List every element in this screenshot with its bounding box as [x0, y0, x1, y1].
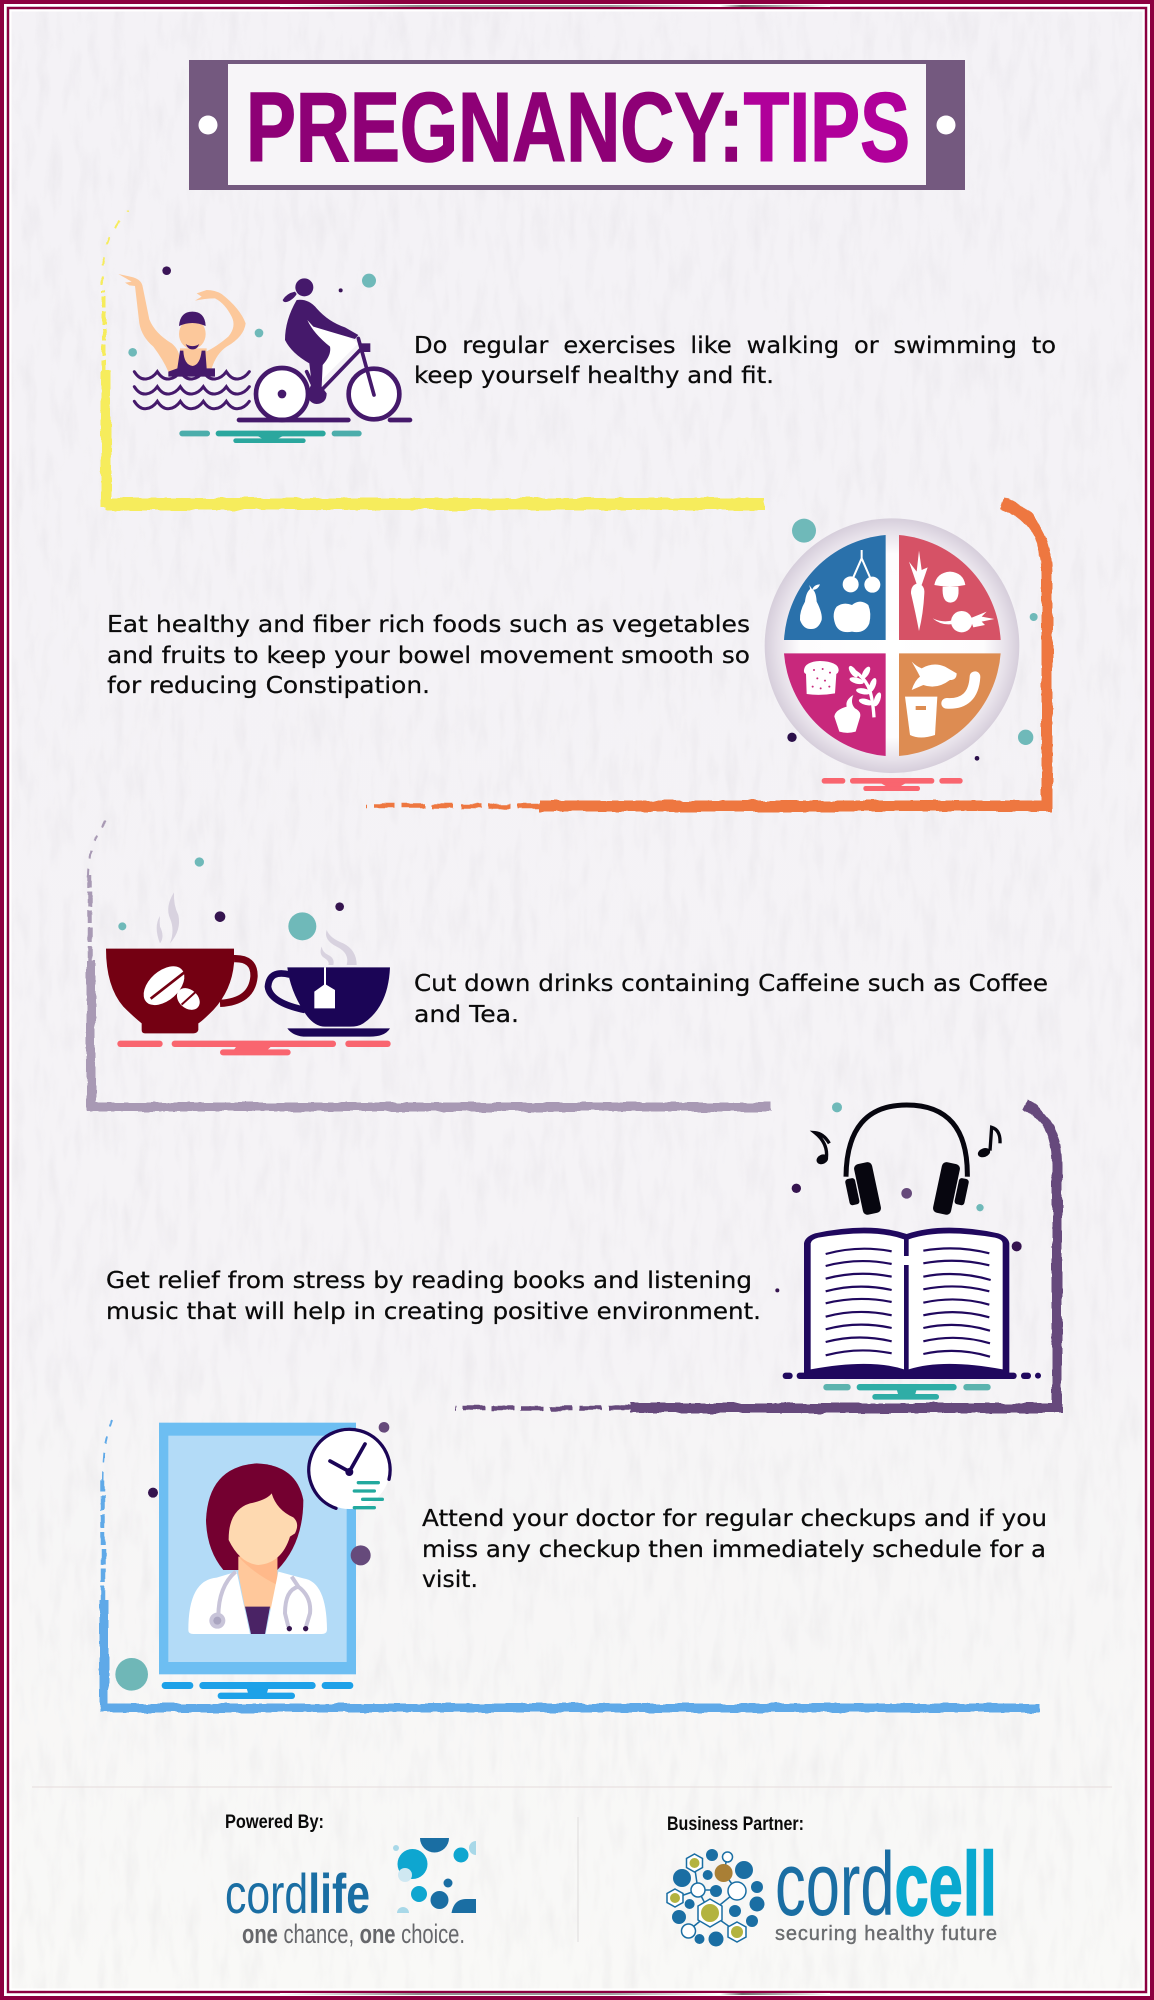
portrait card	[159, 1423, 356, 1674]
frame: purple	[455, 1104, 1057, 1408]
powered by label: Powered By:	[225, 1812, 324, 1833]
clock	[309, 1428, 390, 1509]
swimmer	[118, 274, 249, 409]
protein quadrant	[899, 653, 1001, 756]
footer dividers	[32, 1786, 1112, 1942]
illustration: book and headphones	[775, 1102, 1041, 1400]
plate dots	[787, 519, 1038, 761]
tip 4 text: music that will help in creating positive environment.	[106, 1297, 761, 1325]
illustration: swimming and cycling	[118, 266, 410, 443]
illustration: doctor	[115, 1422, 390, 1699]
frame: yellow	[102, 210, 764, 508]
headphones	[845, 1105, 969, 1216]
cordlife tagline: one chance, one choice.	[242, 1919, 465, 1949]
dots	[128, 266, 376, 357]
cordlife wordmark: cordlife	[225, 1862, 370, 1925]
music notes	[815, 1127, 1000, 1166]
title plate	[189, 60, 965, 190]
cordcell wordmark: cordcell	[775, 1835, 997, 1935]
cordlife mark	[393, 1838, 476, 1913]
tea cup	[268, 930, 390, 1037]
tip 5 text: Attend your doctor for regular checkups and if you	[422, 1504, 1047, 1532]
coffee cup	[106, 892, 254, 1033]
fruit quadrant	[784, 535, 886, 640]
frame: orange	[365, 503, 1047, 806]
open book	[783, 1228, 1041, 1379]
doctor shadow	[162, 1682, 353, 1699]
logo: cordlife	[225, 1838, 476, 1949]
cyclist	[239, 278, 410, 420]
plate	[765, 518, 1019, 773]
tip 2 text: for reducing Constipation.	[107, 671, 430, 699]
tip 1 text	[414, 331, 1056, 389]
cups shadow	[117, 1041, 391, 1055]
plate shadow	[822, 778, 963, 791]
book shadow	[823, 1384, 991, 1400]
tip 2 text	[107, 610, 750, 699]
tip 2 text: and fruits to keep your bowel movement smooth so	[107, 641, 750, 669]
doctor dots	[115, 1422, 389, 1691]
tip 3 text: and Tea.	[414, 1000, 519, 1028]
cordcell tagline: securing healthy future	[775, 1923, 997, 1945]
logo: cordcell	[667, 1835, 997, 1946]
tip 4 text	[106, 1266, 761, 1325]
tip 5 text	[422, 1504, 1047, 1593]
illustration: healthy food plate	[765, 518, 1038, 791]
puddle	[179, 431, 362, 443]
cordcell network mark	[667, 1849, 764, 1946]
illustration: coffee and tea	[106, 857, 391, 1055]
tip 1 text: Do regular exercises like walking or swimming to	[414, 331, 1056, 359]
vegetable quadrant	[899, 535, 1001, 640]
book dots	[775, 1102, 1022, 1292]
tip 4 text: Get relief from stress by reading books and listening	[106, 1266, 752, 1294]
tip 3 text	[414, 969, 1048, 1028]
tip 2 text: Eat healthy and fiber rich foods such as vegetables	[107, 610, 750, 638]
grains quadrant	[784, 653, 886, 756]
tip 3 text: Cut down drinks containing Caffeine such as Coffee	[414, 969, 1048, 997]
doctor figure	[188, 1463, 327, 1634]
title text: PREGNANCY:TIPS	[246, 72, 910, 182]
frame: grey purple	[89, 816, 772, 1107]
business partner label: Business Partner:	[667, 1814, 804, 1835]
tip 1 text: keep yourself healthy and fit.	[414, 361, 774, 389]
tip 5 text: visit.	[422, 1565, 478, 1593]
tip 5 text: miss any checkup then immediately schedule for a	[422, 1535, 1046, 1563]
frame: blue	[103, 1420, 1040, 1708]
cups dots	[118, 857, 344, 940]
